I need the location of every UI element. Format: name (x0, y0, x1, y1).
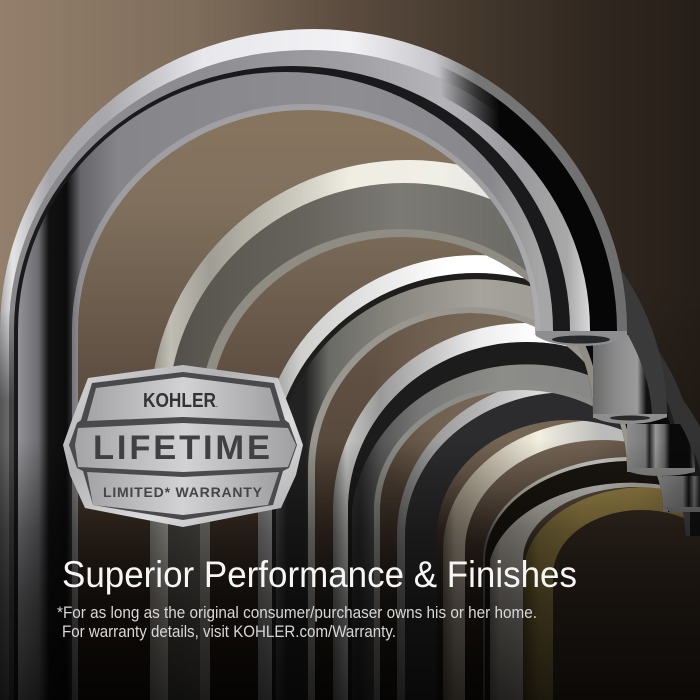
arch: pale nickel faucet (483, 457, 700, 700)
badge panel: brand: . (216, 403, 218, 409)
footnote: *For as long as the original consumer/purchaser owns his or her home. (57, 603, 537, 622)
headline: Superior Performance & Finishes (62, 554, 577, 595)
badge panel: brand (87, 377, 280, 421)
spout: satin nickel faucet (593, 335, 667, 424)
footnote (57, 603, 537, 641)
badge panel: lifetime (75, 423, 296, 472)
arch: satin nickel faucet (150, 160, 667, 700)
badge panel: limited warranty (87, 472, 279, 515)
badge panel: lifetime: LIFETIME (93, 429, 270, 467)
arch: dark chrome faucet (397, 377, 700, 700)
arch: polished nickel faucet (333, 323, 700, 700)
badge panel: brand: KOHLER (143, 389, 216, 412)
arch: bright chrome faucet (258, 255, 695, 700)
spout: dark chrome faucet (683, 512, 700, 536)
arch: brass faucet (523, 487, 700, 700)
badge panel: limited warranty: LIMITED* WARRANTY (103, 484, 263, 500)
footnote: For warranty details, visit KOHLER.com/Warranty. (62, 622, 396, 641)
warranty badge (63, 365, 303, 527)
arch: champagne faucet (443, 420, 700, 700)
spout: bright chrome faucet (627, 424, 695, 476)
leg shading (0, 440, 700, 700)
spout: polished nickel faucet (663, 476, 700, 513)
